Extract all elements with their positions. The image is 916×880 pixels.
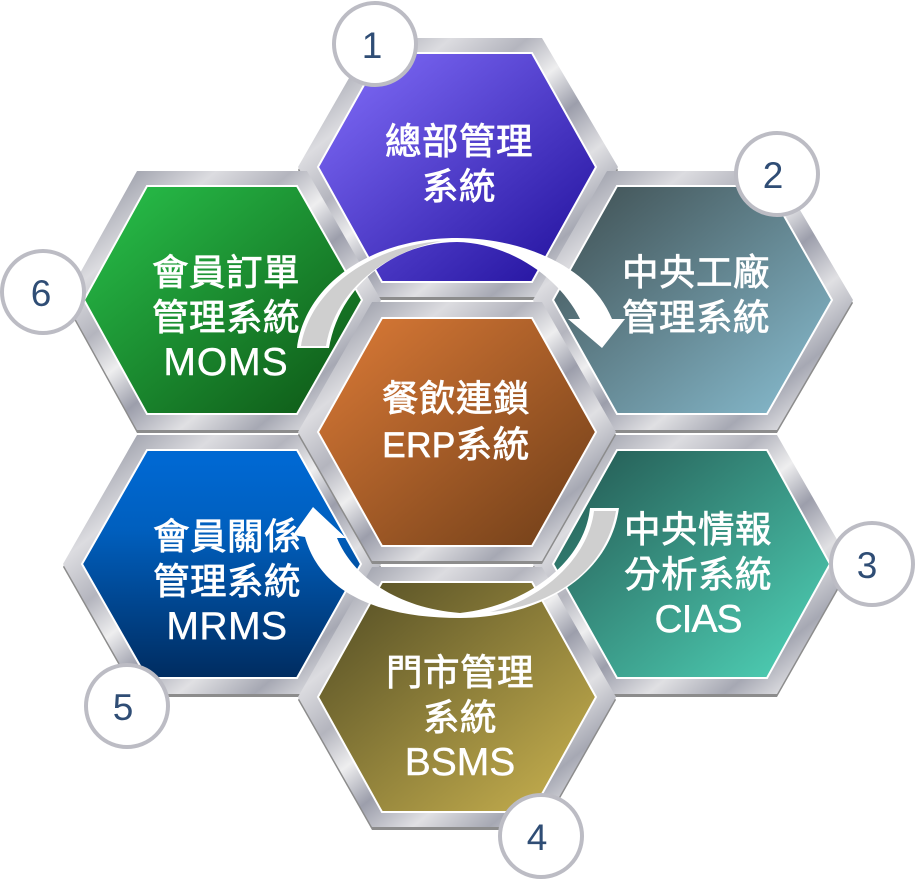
hexagon 4: branch store management: 門市管理 bbox=[386, 652, 534, 693]
number badge 2 bbox=[736, 133, 818, 215]
number badge 1: 1 bbox=[362, 25, 382, 66]
hexagon 1: headquarters management: 總部管理 bbox=[385, 121, 533, 162]
hexagon center: restaurant chain ERP: 餐飲連鎖 bbox=[382, 378, 530, 419]
hexagon 2: central factory management bbox=[533, 171, 853, 433]
number badge 4 bbox=[500, 795, 582, 877]
number badge 6: 6 bbox=[31, 273, 51, 314]
hexagon center: restaurant chain ERP bbox=[298, 302, 616, 564]
number badge 4: 4 bbox=[527, 817, 547, 858]
hexagon center: restaurant chain ERP: ERP系統 bbox=[382, 424, 530, 465]
hexagon 4: branch store management: 系統 bbox=[423, 697, 497, 738]
number badge 2: 2 bbox=[763, 155, 783, 196]
hexagon 3: central intelligence analysis: 分析系統 bbox=[624, 554, 772, 595]
number badge 5 bbox=[86, 665, 168, 747]
hexagon 2: central factory management: 中央工廠 bbox=[622, 252, 770, 293]
hexagon 1: headquarters management bbox=[298, 38, 618, 300]
hexagon 1: headquarters management: 系統 bbox=[422, 166, 496, 207]
hexagon 6: member order management: 管理系統 bbox=[152, 297, 300, 338]
hexagon 3: central intelligence analysis bbox=[533, 435, 851, 697]
number badge 5: 5 bbox=[113, 687, 133, 728]
number badge 6 bbox=[2, 251, 84, 333]
hexagon 5: member relationship management: MRMS bbox=[166, 605, 288, 648]
number badge 3: 3 bbox=[857, 545, 877, 586]
hexagon 4: branch store management bbox=[298, 567, 616, 830]
hexagon 3: central intelligence analysis: 中央情報 bbox=[624, 509, 772, 550]
arrow: clockwise top arrow bbox=[297, 238, 625, 348]
hexagon 3: central intelligence analysis: CIAS bbox=[654, 598, 742, 641]
hexagon 2: central factory management: 管理系統 bbox=[622, 297, 770, 338]
hexagon 5: member relationship management bbox=[63, 435, 381, 697]
number badge 3 bbox=[831, 523, 913, 605]
hexagon 5: member relationship management: 管理系統 bbox=[153, 561, 301, 602]
hexagon 6: member order management bbox=[65, 171, 381, 433]
hexagon 4: branch store management: BSMS bbox=[405, 741, 515, 784]
number badge 1 bbox=[334, 3, 416, 85]
hexagon 5: member relationship management: 會員關係 bbox=[153, 516, 301, 557]
hexagon 6: member order management: MOMS bbox=[163, 341, 289, 384]
hexagon 6: member order management: 會員訂單 bbox=[152, 252, 300, 293]
arrow: clockwise bottom arrow bbox=[293, 507, 619, 618]
